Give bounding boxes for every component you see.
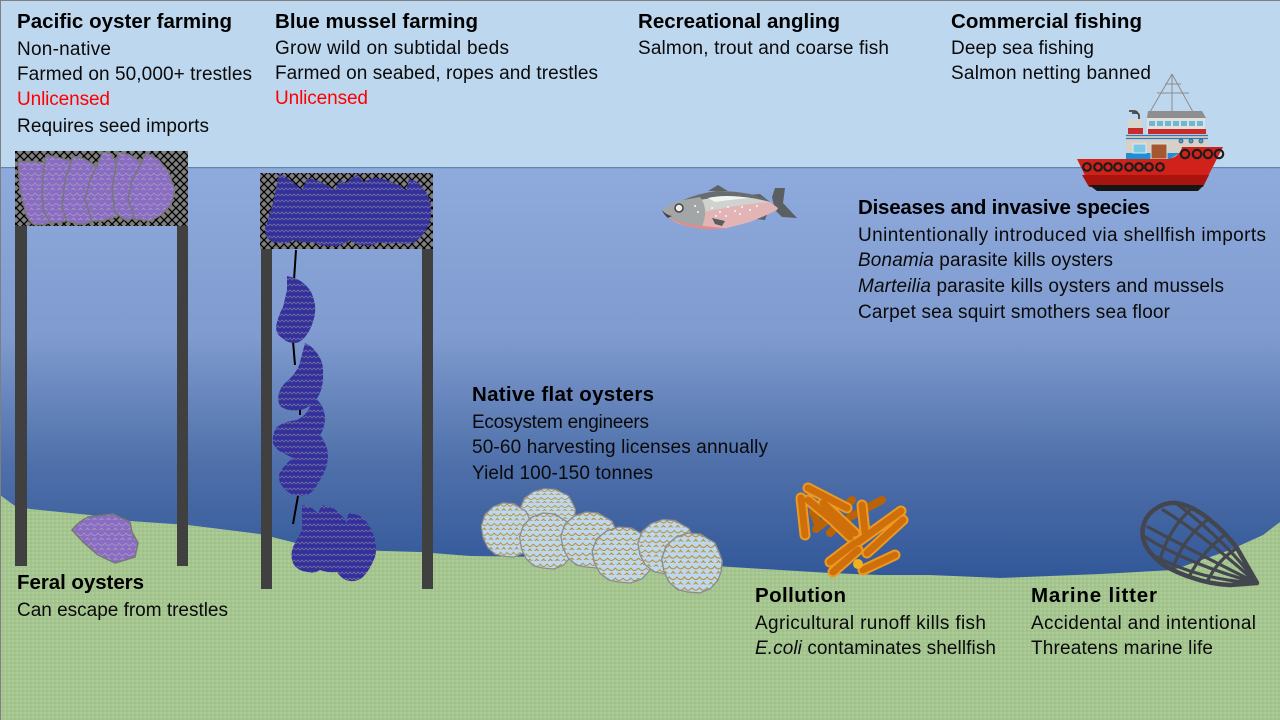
text: Blue mussel farming: Farmed on seabed, ropes and trestles: [275, 63, 598, 84]
text: Native flat oysters: Yield 100-150 tonnes: [472, 463, 653, 484]
dorsal and rear fins: [708, 185, 770, 220]
text: Blue mussel farming: [275, 10, 598, 109]
red railing: [1128, 128, 1206, 134]
sky background: [0, 0, 1280, 168]
text: Pollution: Pollution: [755, 584, 846, 607]
rods: [801, 488, 903, 572]
belly line: [667, 217, 725, 229]
text: Pollution: Agricultural runoff kills fish: [755, 613, 986, 634]
net hoops: [1160, 508, 1237, 580]
text: Commercial fishing: Deep sea fishing: [951, 38, 1094, 59]
cabin door: [1151, 144, 1167, 159]
hull dark band: [1082, 175, 1209, 187]
farmed mussels on tray: [265, 174, 431, 246]
head: [662, 197, 705, 227]
icon: fishing boat: [1077, 74, 1223, 191]
hull: [1077, 147, 1223, 186]
funnel box: [1128, 119, 1142, 128]
wheelhouse roof: [1147, 111, 1206, 118]
back rods: [813, 500, 882, 533]
text: Recreational angling: Salmon, trout and coarse fish: [638, 38, 889, 59]
trestle legs: [261, 249, 433, 589]
pectoral fin: [712, 218, 725, 226]
tyres: [1083, 150, 1223, 171]
cabin stripes: [1126, 136, 1208, 138]
text: Native flat oysters: Native flat oysters: [472, 383, 654, 406]
trestle mesh tray: [260, 173, 433, 249]
funnel: [1129, 111, 1139, 128]
portholes: [1179, 139, 1203, 143]
sea floor: [0, 495, 1280, 720]
icon: feral oyster: [72, 514, 138, 563]
mussel rope: [293, 250, 300, 524]
eye: [675, 204, 683, 212]
text: Commercial fishing: Commercial fishing: [951, 10, 1142, 33]
icon: salmon: [662, 185, 797, 229]
dark back stripe: [683, 191, 770, 204]
text: Pacific oyster farming: [17, 10, 252, 137]
text: Feral oysters: Feral oysters: [17, 571, 144, 594]
text: Diseases and invasive species: Diseases and invasive species: [858, 196, 1150, 219]
net outline: [1142, 503, 1257, 585]
body: [662, 192, 778, 229]
trestle legs: [15, 226, 188, 566]
mussels on sea floor: [292, 505, 376, 581]
text: Pacific oyster farming: Farmed on 50,000+ trestles: [17, 64, 252, 85]
text: Diseases and invasive species: Carpet sea squirt smothers sea floor: [858, 302, 1171, 323]
text: Blue mussel farming: Grow wild on subtidal beds: [275, 38, 509, 59]
silver back: [700, 193, 770, 212]
end-on rod: [853, 559, 863, 569]
tail fin: [772, 188, 797, 218]
sea surface line: [0, 167, 1280, 168]
text: Pollution: [755, 584, 996, 659]
mast and rigging: [1150, 74, 1193, 112]
text: Native flat oysters: [472, 383, 768, 484]
native flat oysters: [481, 489, 722, 593]
text: Marine litter: Accidental and intentional: [1031, 613, 1256, 634]
spots: [694, 205, 758, 217]
text: Diseases and invasive species: Bonamia parasite kills oysters: [858, 250, 1113, 271]
text: Marine litter: Marine litter: [1031, 584, 1157, 607]
text: Blue mussel farming: Blue mussel farming: [275, 10, 478, 33]
trestle mesh tray: [15, 151, 188, 226]
icon: E. coli bacteria: [801, 488, 903, 572]
mussels on rope: [273, 276, 328, 496]
net ribs: [1145, 504, 1257, 583]
jaw: [662, 210, 672, 218]
trestle: Pacific oysters: [15, 151, 188, 566]
text: Pacific oyster farming: Non-native: [17, 39, 111, 60]
wheelhouse: [1147, 118, 1205, 134]
text: Marine litter: [1031, 584, 1256, 659]
text: Diseases and invasive species: Marteilia parasite kills oysters and mussels: [858, 276, 1224, 297]
wheelhouse windows: [1149, 121, 1203, 126]
blue base stripe: [1126, 153, 1180, 160]
text: Diseases and invasive species: Unintentionally introduced via shellfish imports: [858, 225, 1266, 246]
text: Commercial fishing: [951, 10, 1151, 84]
text: Recreational angling: Recreational angling: [638, 10, 840, 33]
hull keel: [1089, 185, 1204, 191]
text: Pacific oyster farming: Requires seed imports: [17, 116, 209, 137]
text: Recreational angling: [638, 10, 889, 59]
text: Blue mussel farming: Unlicensed: [275, 88, 368, 109]
text: Feral oysters: Can escape from trestles: [17, 600, 228, 621]
text: Feral oysters: [17, 571, 228, 621]
cabin window: [1133, 144, 1146, 153]
farmed Pacific oysters: [18, 152, 175, 225]
icon: marine litter fishing net: [1142, 503, 1257, 585]
text: Native flat oysters: Ecosystem engineers: [472, 412, 649, 433]
text: Native flat oysters: 50-60 harvesting licenses annually: [472, 437, 768, 458]
text: Pacific oyster farming: Pacific oyster farming: [17, 10, 232, 33]
cabin: [1126, 134, 1208, 159]
text: Marine litter: Threatens marine life: [1031, 638, 1213, 659]
sea with depth gradient: [0, 167, 1280, 590]
rod glow outlines: [801, 488, 903, 572]
highlight: [708, 196, 750, 202]
trestle: blue mussels: [260, 173, 433, 589]
text: Commercial fishing: Salmon netting banned: [951, 63, 1151, 84]
text: Pollution: E.coli contaminates shellfish: [755, 638, 996, 659]
text: Diseases and invasive species: [858, 196, 1266, 323]
text: Pacific oyster farming: Unlicensed: [17, 89, 110, 110]
